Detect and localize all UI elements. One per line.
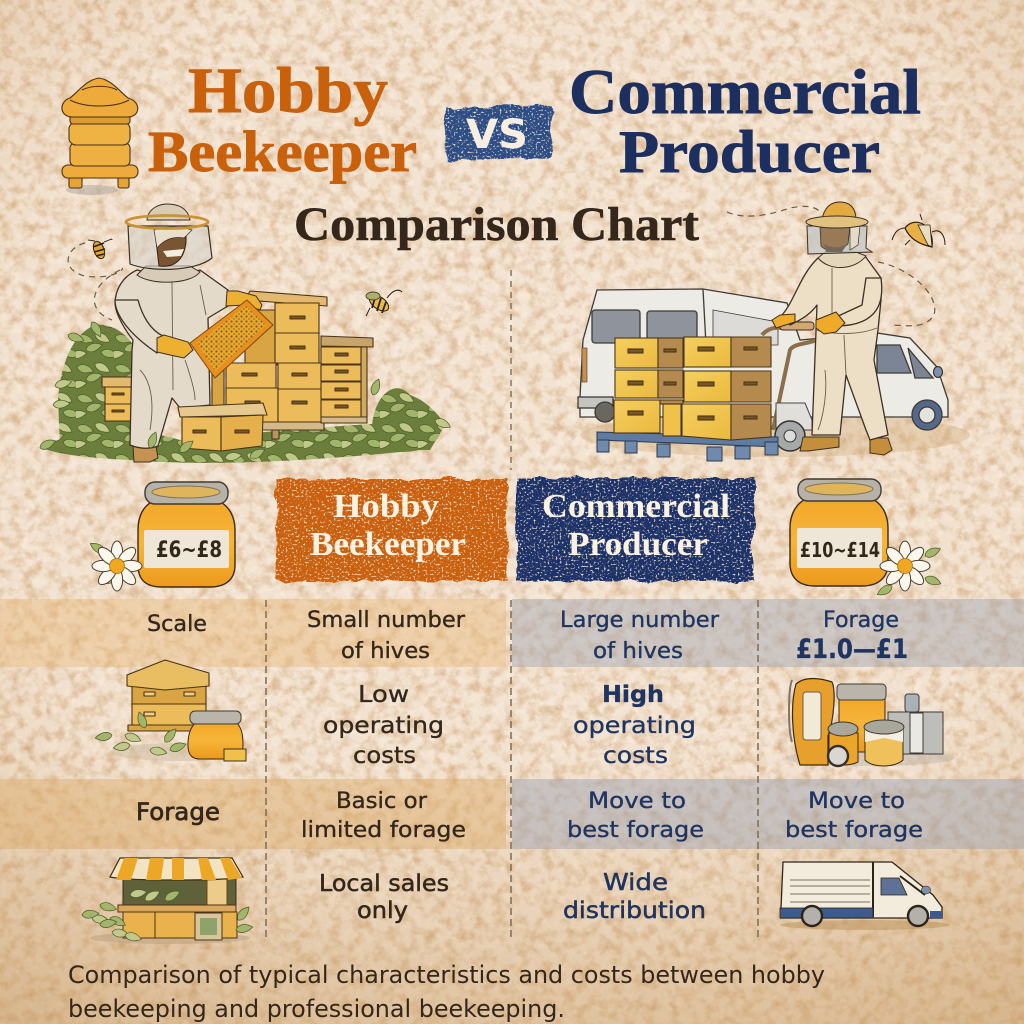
title: commercial producer: Commercial <box>569 56 921 127</box>
stacked hive boxes <box>614 337 771 440</box>
title: hobby beekeeper <box>148 55 417 184</box>
vs badge <box>444 105 552 160</box>
row 3: forage: best forage <box>567 817 704 843</box>
icon: white delivery van <box>780 862 950 930</box>
bee right <box>366 290 402 316</box>
honeycomb frame <box>190 300 273 378</box>
front foliage <box>146 431 267 462</box>
icon: hive and honey jar <box>95 660 250 761</box>
header: hobby beekeeper <box>276 479 507 581</box>
jar: commercial price <box>790 479 942 598</box>
row 1: scale: of hives <box>341 639 430 664</box>
jar: hobby price: £6~£8 <box>156 538 222 563</box>
row 1: scale: Forage <box>823 608 899 633</box>
row 1: scale: Large number <box>560 608 720 633</box>
header: hobby beekeeper: Beekeeper <box>310 526 466 563</box>
title: commercial producer <box>569 56 921 185</box>
row 3: forage <box>136 788 923 843</box>
row 4: sales <box>319 870 706 924</box>
bee left <box>88 239 112 260</box>
row 1: scale: of hives <box>593 639 683 664</box>
delivery van <box>578 289 948 430</box>
icon: skep beehive <box>62 78 138 195</box>
gloves <box>772 314 795 328</box>
row 4: sales: only <box>357 898 408 924</box>
row 2: operating costs: Low <box>358 682 409 708</box>
illustration: commercial producer with van <box>578 202 970 461</box>
subtitle: comparison chart: Comparison Chart <box>294 198 699 251</box>
trolley <box>762 322 823 451</box>
hat and veil <box>128 226 212 269</box>
row 1: scale <box>147 608 908 665</box>
back left hive <box>102 377 138 421</box>
hobby beekeeper figure <box>115 204 273 462</box>
bee flight paths <box>68 243 122 320</box>
front hive box <box>178 403 267 451</box>
row 4: sales: Local sales <box>319 871 449 897</box>
bee <box>892 214 945 247</box>
header: commercial producer <box>516 478 754 581</box>
bee flight path <box>727 206 935 326</box>
bushes <box>38 320 452 463</box>
row 3: forage: Move to <box>588 788 686 814</box>
row 4: sales: Wide <box>603 870 668 896</box>
row 3: forage: Basic or <box>336 788 428 814</box>
boot <box>133 446 158 462</box>
footer caption <box>68 961 825 1023</box>
footer caption: Comparison of typical characteristics and costs between hobby <box>68 961 825 989</box>
row 3: forage: Forage <box>136 798 220 826</box>
jar: commercial price: £10~£14 <box>800 538 880 562</box>
icon: market stall <box>82 858 253 944</box>
title: commercial producer: Producer <box>619 119 880 185</box>
gloves <box>157 335 193 358</box>
pallet <box>597 432 778 461</box>
jar: hobby price <box>88 482 235 591</box>
suit <box>782 256 888 440</box>
illustration: hobby beekeeper at hives <box>38 204 452 463</box>
boots <box>800 437 839 451</box>
veil and head <box>807 226 872 254</box>
row 1: scale: Scale <box>147 612 207 637</box>
suit <box>115 270 228 448</box>
row 2: operating costs: costs <box>353 743 416 769</box>
centre hive stack <box>212 291 327 439</box>
hat <box>822 202 856 220</box>
row 2: operating costs <box>323 682 696 769</box>
title: hobby beekeeper: Beekeeper <box>148 119 417 184</box>
row 2: operating costs: costs <box>603 743 668 769</box>
table row bands <box>0 599 1024 849</box>
row 1: scale: Small number <box>307 608 466 633</box>
row 2: operating costs: High <box>602 682 664 708</box>
header: commercial producer: Commercial <box>542 488 730 525</box>
header: commercial producer: Producer <box>568 526 708 563</box>
commercial beekeeper figure <box>772 202 892 455</box>
row 3: forage: best forage <box>785 817 923 843</box>
row 3: forage: limited forage <box>301 817 466 843</box>
vs badge: VS <box>466 112 528 158</box>
header: hobby beekeeper: Hobby <box>333 488 439 525</box>
right hive stack <box>321 336 373 423</box>
row 2: operating costs: operating <box>573 713 696 739</box>
row 1: scale: £1.0—£1 <box>796 634 908 665</box>
row 2: operating costs: operating <box>323 713 444 739</box>
table column dividers <box>266 270 758 940</box>
icon: commercial equipment <box>785 678 955 766</box>
footer caption: beekeeping and professional beekeeping. <box>68 995 565 1023</box>
ground shadow <box>580 413 970 457</box>
title: hobby beekeeper: Hobby <box>188 55 388 127</box>
row 3: forage: Move to <box>808 788 905 814</box>
row 4: sales: distribution <box>563 898 706 924</box>
